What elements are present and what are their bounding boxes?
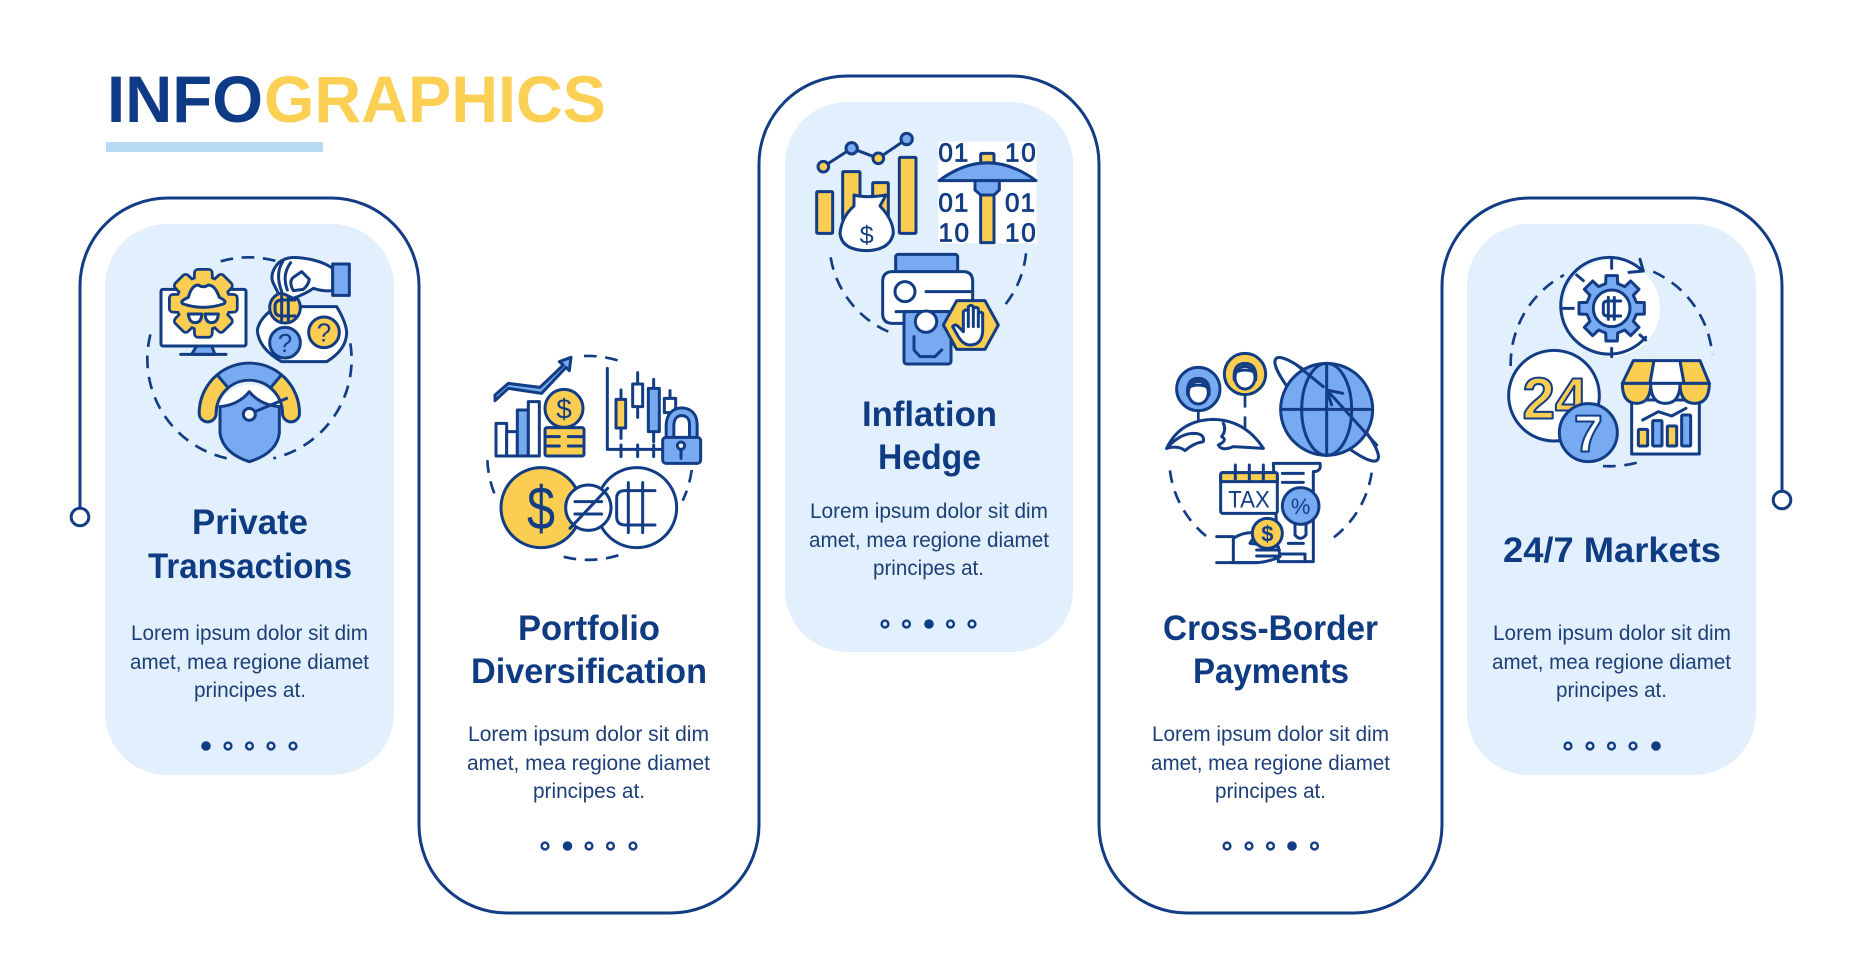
icon: private transactions: ? (317, 318, 331, 348)
heading: Payments (1193, 652, 1349, 691)
panel: private transactions (105, 224, 394, 775)
heading: Inflation (862, 395, 997, 434)
title: GRAPHICS (264, 62, 606, 136)
pagination dots (1565, 742, 1660, 750)
icon: cross-border payments (1167, 348, 1388, 563)
body text: principes at. (873, 557, 984, 580)
icon: 24/7 markets: 7 (1574, 405, 1603, 463)
body text: Lorem ipsum dolor sit dim (1493, 622, 1731, 645)
icon: cross-border payments: % (1291, 494, 1310, 519)
icon: cross-border payments: $ (1261, 521, 1273, 546)
heading (148, 503, 352, 586)
title underline (106, 142, 323, 152)
pagination dots (1224, 842, 1318, 850)
panel: 24/7 markets (1467, 224, 1756, 775)
heading (471, 609, 707, 691)
body text: principes at. (1215, 780, 1326, 803)
body text: Lorem ipsum dolor sit dim (468, 723, 709, 746)
body text: principes at. (1556, 679, 1667, 702)
body text: amet, mea regione diamet (130, 651, 369, 674)
heading: Portfolio (518, 609, 660, 648)
body text: principes at. (533, 780, 645, 803)
icon: inflation hedge (817, 133, 1037, 364)
icon: inflation hedge: 01 (1005, 188, 1035, 218)
icon: portfolio diversification: $ (556, 393, 572, 424)
connector end circle (1773, 491, 1791, 509)
body text: amet, mea regione diamet (467, 752, 710, 775)
body text: Lorem ipsum dolor sit dim (810, 500, 1048, 523)
title: INFO (107, 62, 263, 136)
icon: portfolio diversification (487, 356, 701, 560)
pagination dots (882, 620, 975, 628)
icon: private transactions (147, 257, 352, 462)
pagination dots (202, 742, 296, 750)
pagination dots (542, 842, 636, 850)
body text (809, 500, 1049, 580)
body text (1492, 622, 1731, 702)
icon: inflation hedge: 10 (1005, 138, 1036, 168)
icon: private transactions: ? (278, 328, 292, 358)
body text: Lorem ipsum dolor sit dim (131, 622, 368, 645)
heading: Private (192, 503, 308, 542)
body text: Lorem ipsum dolor sit dim (1152, 723, 1389, 746)
heading: Hedge (878, 438, 981, 477)
icon: inflation hedge: 01 (938, 138, 968, 168)
body text: amet, mea regione diamet (1492, 651, 1731, 674)
icon: inflation hedge: 01 (938, 188, 968, 218)
connector start circle (71, 508, 89, 526)
panel: inflation hedge (785, 102, 1073, 652)
icon: inflation hedge: $ (860, 221, 874, 249)
heading (862, 395, 997, 477)
title (107, 62, 606, 136)
icon: 24/7 markets: 24 (1522, 366, 1588, 431)
icon: portfolio diversification: $ (527, 474, 555, 543)
heading (1163, 609, 1378, 691)
icon: inflation hedge: 10 (1005, 218, 1036, 248)
heading: Cross-Border (1163, 609, 1378, 648)
panel: cross-border payments (1151, 348, 1390, 850)
body text (1151, 723, 1390, 803)
body text (467, 723, 710, 803)
heading: 24/7 Markets (1503, 531, 1721, 570)
body text: principes at. (194, 679, 306, 702)
icon: inflation hedge: 10 (938, 218, 969, 248)
connector outline running through all panels (80, 76, 1782, 913)
body text (130, 622, 369, 702)
heading: Diversification (471, 652, 707, 691)
panel: portfolio diversification (467, 356, 710, 850)
body text: amet, mea regione diamet (809, 529, 1049, 552)
heading: Transactions (148, 547, 352, 586)
body text: amet, mea regione diamet (1151, 752, 1390, 775)
icon: cross-border payments: TAX (1228, 486, 1270, 513)
icon: 24/7 markets (1509, 257, 1712, 466)
